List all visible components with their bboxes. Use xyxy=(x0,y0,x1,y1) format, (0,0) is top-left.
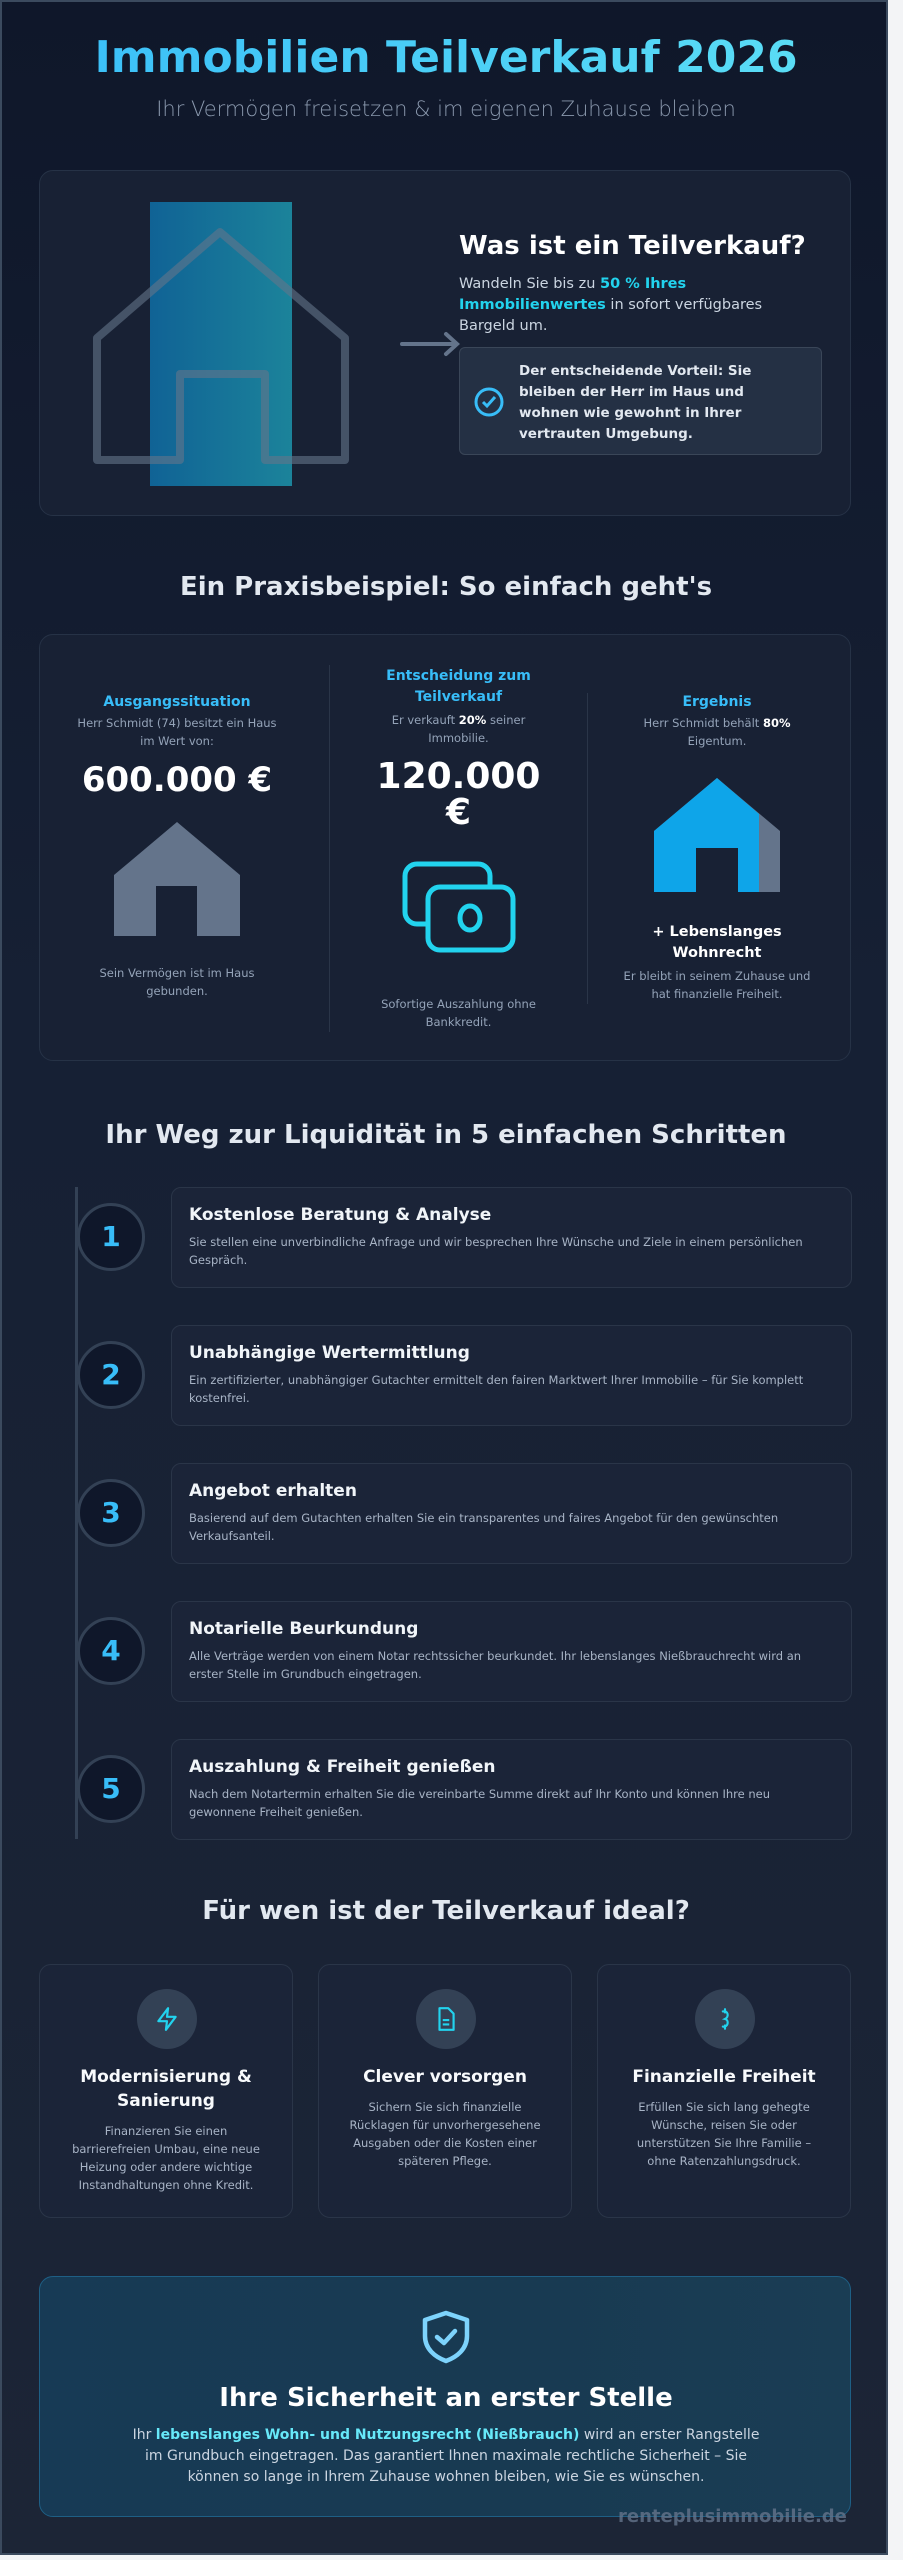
card: Finanzielle Freiheit xyxy=(597,1964,851,2218)
column: Ausgangssituation: Ausgangssituation xyxy=(103,694,251,710)
icon: document xyxy=(416,1989,476,2049)
column: Ausgangssituation: Herr Schmidt (74) besitzt ein Haus xyxy=(77,716,277,730)
card: Modernisierung: Finanzieren Sie einen barrierefreien Umbau, eine neue Heizung oder andere wichtige Instandhaltungen ohne Kredit. xyxy=(72,2124,260,2192)
column: Entscheidung xyxy=(377,668,540,1029)
arrow xyxy=(400,332,460,356)
column: Ausgangssituation: 600.000 € xyxy=(82,760,272,800)
panel: was ist ein Teilverkauf xyxy=(39,170,851,516)
column: Ausgangssituation: Sein Vermögen ist im Haus xyxy=(99,966,255,980)
step 4 xyxy=(78,1601,852,1702)
card: Clever vorsorgen: Sichern Sie sich finanzielle Rücklagen für unvorhergesehene Ausgaben oder die Kosten einer späteren Pflege. xyxy=(349,2100,541,2168)
step 2 xyxy=(78,1325,852,1426)
step 5: Nach dem Notartermin erhalten Sie die vereinbarte Summe direkt auf Ihr Konto und können Ihre neu gewonnene Freiheit genießen. xyxy=(189,1787,770,1819)
step 3: 3 xyxy=(101,1496,121,1529)
card: Modernisierung xyxy=(39,1964,293,2218)
column: Entscheidung: Bankkredit. xyxy=(426,1015,491,1029)
step 4: Notarielle Beurkundung xyxy=(189,1619,418,1639)
heading: 5 Schritte: Ihr Weg zur Liquidität in 5 einfachen Schritten xyxy=(105,1120,787,1150)
step 2: Unabhängige Wertermittlung xyxy=(189,1343,470,1363)
text: Ihr lebenslanges Wohn- und Nutzungsrecht (Nießbrauch) wird an erster Rangstelle im Grundbuch eingetragen. Das garantiert Ihnen maximale rechtliche Sicherheit – Sie können so lange in Ihrem Zuhause wohnen bleiben, wie Sie es wünschen. xyxy=(133,2427,759,2485)
icon: money xyxy=(402,862,516,952)
subtitle: Ihr Vermögen freisetzen & im eigenen Zuhause bleiben xyxy=(156,97,736,121)
column: Entscheidung: € xyxy=(446,792,471,833)
icon: shield xyxy=(422,2310,470,2364)
step 2: Ein zertifizierter, unabhängiger Gutachter ermittelt den fairen Marktwert Ihrer Immobilie – für Sie komplett kostenfrei. xyxy=(189,1373,803,1405)
heading: Ihre Sicherheit an erster Stelle xyxy=(219,2383,673,2413)
column: Ausgangssituation xyxy=(77,694,277,998)
column: Ausgangssituation: gebunden. xyxy=(146,984,208,998)
panel: Sicherheit xyxy=(39,2276,851,2517)
step 1: Kostenlose Beratung & Analyse xyxy=(189,1205,491,1225)
column: Entscheidung: Entscheidung zum xyxy=(386,668,531,684)
heading: Für wen: Für wen ist der Teilverkauf ideal? xyxy=(202,1896,690,1926)
timeline xyxy=(75,1187,852,1840)
column: Ergebnis: hat finanzielle Freiheit. xyxy=(651,987,783,1001)
card: Modernisierung: Sanierung xyxy=(117,2091,215,2111)
heading: Was ist ein Teilverkauf? xyxy=(459,231,806,261)
step 1 xyxy=(78,1187,852,1288)
step 3 xyxy=(78,1463,852,1564)
column: Entscheidung: Teilverkauf xyxy=(415,689,502,705)
card: Finanzielle Freiheit: Finanzielle Freiheit xyxy=(632,2067,816,2087)
card: Clever vorsorgen: Clever vorsorgen xyxy=(363,2067,527,2087)
icon: blue house 80% xyxy=(654,778,780,892)
icon: lightning xyxy=(137,1989,197,2049)
column: Ergebnis xyxy=(624,694,810,1001)
card: Finanzielle Freiheit: Erfüllen Sie sich lang gehegte Wünsche, reisen Sie oder unterstützen Sie Ihre Familie – ohne Ratenzahlungsdruck. xyxy=(637,2100,811,2168)
card: Clever vorsorgen xyxy=(318,1964,572,2218)
column: Entscheidung: Sofortige Auszahlung ohne xyxy=(381,997,536,1011)
panel: Praxisbeispiel xyxy=(39,634,851,1061)
step 1: 1 xyxy=(101,1220,121,1253)
column: Entscheidung: Immobilie. xyxy=(428,731,489,745)
callout: advantage xyxy=(459,347,822,455)
column: Ergebnis: Eigentum. xyxy=(688,734,746,748)
watermark: renteplusimmobilie.de xyxy=(618,2506,847,2527)
step 2: 2 xyxy=(101,1358,121,1391)
column: Ergebnis: Wohnrecht xyxy=(673,945,761,961)
column: Entscheidung: 120.000 xyxy=(377,756,540,797)
step 5: 5 xyxy=(101,1772,121,1805)
illustration: house with highlighted share xyxy=(93,202,349,486)
column: Entscheidung: Er verkauft 20% seiner xyxy=(392,713,525,727)
callout: advantage: Der entscheidende Vorteil: Sie bleiben der Herr im Haus und wohnen wie gewohnt in Ihrer vertrauten Umgebung. xyxy=(519,363,751,442)
step 5 xyxy=(78,1739,852,1840)
step 4: 4 xyxy=(101,1634,121,1667)
column: Ergebnis: Herr Schmidt behält 80% xyxy=(643,716,790,730)
icon: check circle xyxy=(474,388,504,416)
step 1: Sie stellen eine unverbindliche Anfrage und wir besprechen Ihre Wünsche und Ziele in einem persönlichen Gespräch. xyxy=(189,1235,803,1267)
step 3: Angebot erhalten xyxy=(189,1481,357,1501)
column: Ergebnis: Ergebnis xyxy=(682,694,752,710)
column: Ergebnis: + Lebenslanges xyxy=(652,924,782,940)
step 4: Alle Verträge werden von einem Notar rechtssicher beurkundet. Ihr lebenslanges Nießbrauchrecht wird an erster Stelle im Grundbuch eingetragen. xyxy=(189,1649,801,1681)
step 5: Auszahlung & Freiheit genießen xyxy=(189,1757,496,1777)
heading: Praxisbeispiel: Ein Praxisbeispiel: So einfach geht's xyxy=(180,572,712,602)
icon: coin xyxy=(695,1989,755,2049)
text block: Wandeln Sie bis zu 50 % Ihres Immobilienwertes in sofort verfügbares Bargeld um. xyxy=(459,276,762,334)
column: Ergebnis: Er bleibt in seinem Zuhause und xyxy=(624,969,810,983)
column: Ausgangssituation: im Wert von: xyxy=(140,734,214,748)
title: Immobilien Teilverkauf 2026 xyxy=(94,32,798,83)
icon: gray house xyxy=(114,822,240,936)
card: Modernisierung: Modernisierung & xyxy=(80,2067,252,2087)
step 3: Basierend auf dem Gutachten erhalten Sie ein transparentes und faires Angebot für den gewünschten Verkaufsanteil. xyxy=(189,1511,778,1543)
